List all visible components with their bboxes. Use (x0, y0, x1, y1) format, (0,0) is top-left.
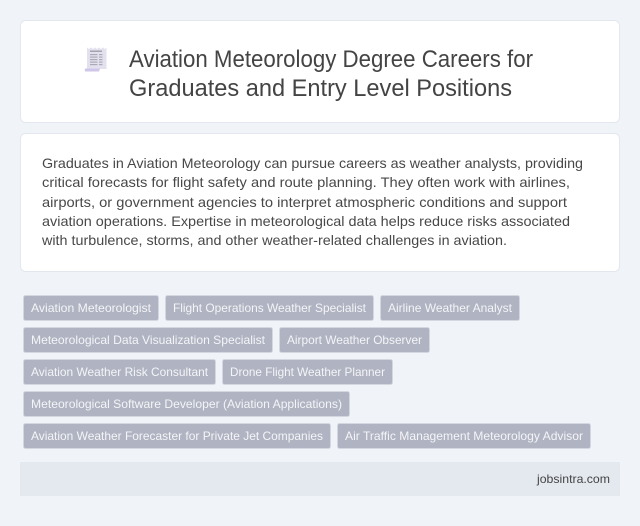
tag: Flight Operations Weather Specialist: Flight Operations Weather Specialist (173, 301, 367, 315)
tag: Air Traffic Management Meteorology Advisor (338, 424, 590, 448)
tag: Air Traffic Management Meteorology Advisor: Air Traffic Management Meteorology Advisor (345, 429, 583, 443)
tag: Airline Weather Analyst: Airline Weather Analyst (388, 301, 513, 315)
icon: document (85, 48, 106, 72)
tag: Flight Operations Weather Specialist (166, 296, 374, 320)
tag: Meteorological Data Visualization Specialist: Meteorological Data Visualization Specialist (31, 333, 266, 347)
tag: Airport Weather Observer: Airport Weather Observer (287, 333, 422, 347)
footer: jobsintra.com (536, 472, 610, 486)
panel: description: Graduates in Aviation Meteorology can pursue careers as weather analysts, providing (42, 155, 583, 171)
title: Graduates and Entry Level Positions (129, 75, 512, 102)
tag: Airport Weather Observer (280, 328, 430, 352)
tag: Aviation Meteorologist (24, 296, 158, 320)
career tags (24, 296, 590, 448)
tag: Aviation Weather Forecaster for Private Jet Companies (24, 424, 330, 448)
tag: Meteorological Software Developer: Meteorological Software Developer (Aviation Applications) (31, 397, 342, 411)
tag: Aviation Weather Risk Consultant (24, 360, 216, 384)
tag: Aviation Weather Forecaster for Private Jet Companies: Aviation Weather Forecaster for Private Jet Companies (31, 429, 323, 443)
panel: title header (20, 20, 620, 122)
tag: Meteorological Software Developer (24, 392, 350, 416)
tag: Airline Weather Analyst (380, 296, 520, 320)
tag: Drone Flight Weather Planner: Drone Flight Weather Planner (230, 365, 385, 379)
tag: Drone Flight Weather Planner (222, 360, 392, 384)
panel: description: with turbulence, storms, and other weather-related challenges in aviation. (41, 232, 507, 248)
title: Aviation Meteorology Degree Careers for (129, 46, 533, 73)
panel: description: airports, or government agencies to interpret atmospheric conditions and support (42, 194, 567, 210)
tag: Aviation Meteorologist: Aviation Meteorologist (31, 301, 152, 315)
tag: Aviation Weather Risk Consultant: Aviation Weather Risk Consultant (31, 365, 209, 379)
panel: description: aviation operations. Expertise in meteorological data helps reduce risks associated (42, 213, 570, 229)
panel: description (20, 134, 620, 272)
title (129, 46, 533, 102)
tag: Meteorological Data Visualization Specialist (24, 328, 272, 352)
footer (20, 462, 620, 496)
panel: description: critical forecasts for flight safety and route planning. They often work with airlines, (42, 174, 570, 190)
